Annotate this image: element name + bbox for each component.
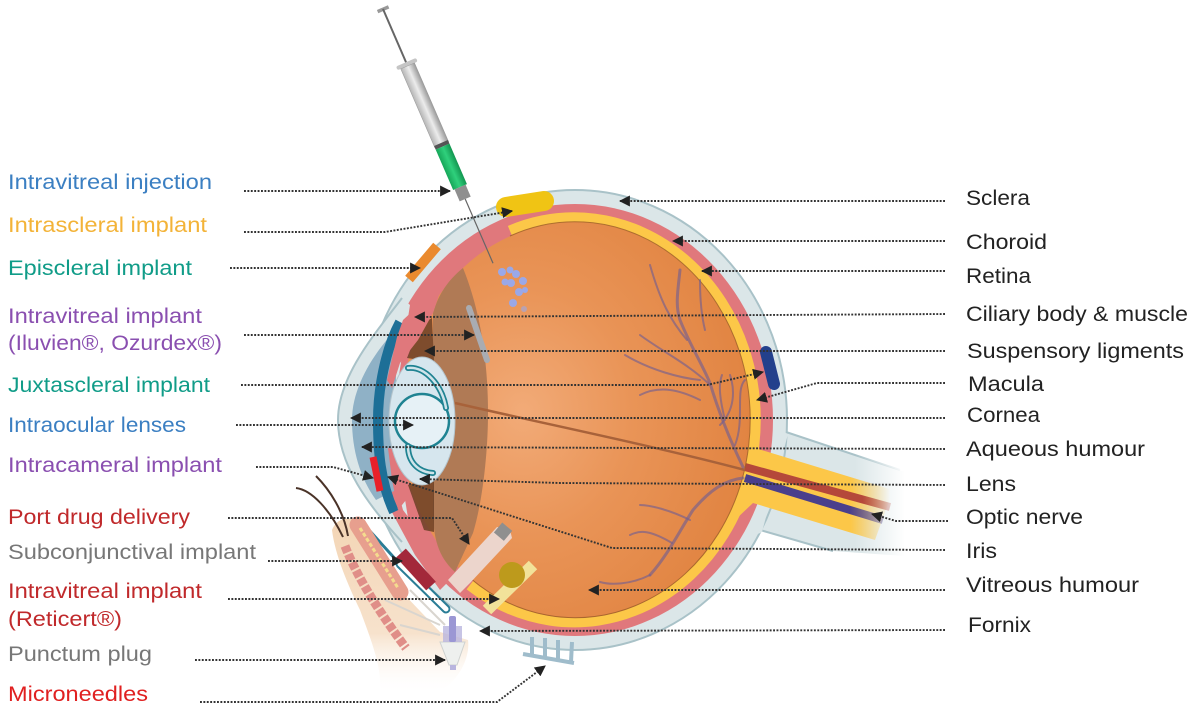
label: Intravitreal implant: Intravitreal implant [8,580,202,603]
lens axis canal [455,403,745,470]
label: Sclera: Sclera [966,187,1030,210]
intracameral implant [373,457,380,491]
lens [389,357,455,485]
cornea [338,298,410,542]
label: Iris: Iris [966,540,997,563]
label: Port drug delivery: Port drug delivery [8,506,191,529]
port drug delivery [448,523,512,593]
icon: syringe [372,3,503,268]
optic nerve [735,445,893,540]
sclera outer coat and optic nerve sheath [363,190,905,650]
label: Intracameral implant: Intracameral implant [8,454,222,477]
label: Intravitreal implant: Intravitreal implant [8,305,202,328]
label: Intraocular lenses: Intraocular lenses [8,414,186,437]
label: Juxtascleral implant: Juxtascleral implant [8,374,210,397]
iris lower root [388,448,410,510]
label: Macula: Macula [968,373,1044,396]
vitreous humour [400,222,750,618]
label: Intravitreal injection: Intravitreal injection [8,171,212,194]
zonule ligaments [407,318,434,532]
choroid layer [377,204,773,636]
iris [378,322,400,512]
retinal vessels [600,265,745,584]
label: Vitreous humour: Vitreous humour [966,574,1139,597]
leader arrows [195,191,948,702]
label: Aqueous humour: Aqueous humour [966,438,1145,461]
label: Optic nerve: Optic nerve [966,506,1083,529]
label: Microneedles: Microneedles [8,683,148,706]
icon: eyelashes [296,476,348,537]
tarsal muscle [345,546,406,648]
label: Intrascleral implant: Intrascleral implant [8,214,207,237]
label: Suspensory ligments: Suspensory ligments [967,340,1184,363]
intravitreal implant rod [469,308,487,360]
subconjunctival implant [401,553,431,586]
label: Iluvien, Ozurdex: (Iluvien®, Ozurdex®) [8,332,222,355]
label: Episcleral implant: Episcleral implant [8,257,192,280]
retina layer [470,218,755,622]
label: Cornea: Cornea [967,404,1040,427]
label: Choroid: Choroid [966,231,1047,254]
icon: microneedles [523,637,574,663]
ciliary body [433,268,488,572]
label: Reticert: (Reticert®) [8,608,122,631]
label: Subconjunctival implant: Subconjunctival implant [8,541,256,564]
icon: drug particles [498,266,528,312]
label: Punctum plug: Punctum plug [8,643,152,666]
intravitreal implant (Reticert) [487,562,533,610]
label: Fornix: Fornix [968,614,1032,637]
icon: punctum plug [440,616,465,670]
label: Retina: Retina [966,265,1031,288]
ciliary muscle upper [387,283,443,388]
intraocular lens implant [395,368,449,473]
lower choroid wedge [388,470,453,590]
right labels [966,187,1188,637]
label: Lens: Lens [966,473,1016,496]
left labels [8,171,256,706]
intrascleral implant [506,201,544,207]
episcleral implant [409,246,437,279]
conjunctival fold [358,518,446,609]
illustration: eyelid [296,476,468,695]
tarsal plate [358,525,400,592]
anterior chamber (aqueous humour) [352,322,403,500]
label: Ciliary body and muscle: Ciliary body & muscle [966,303,1188,326]
juxtascleral implant [766,352,774,384]
